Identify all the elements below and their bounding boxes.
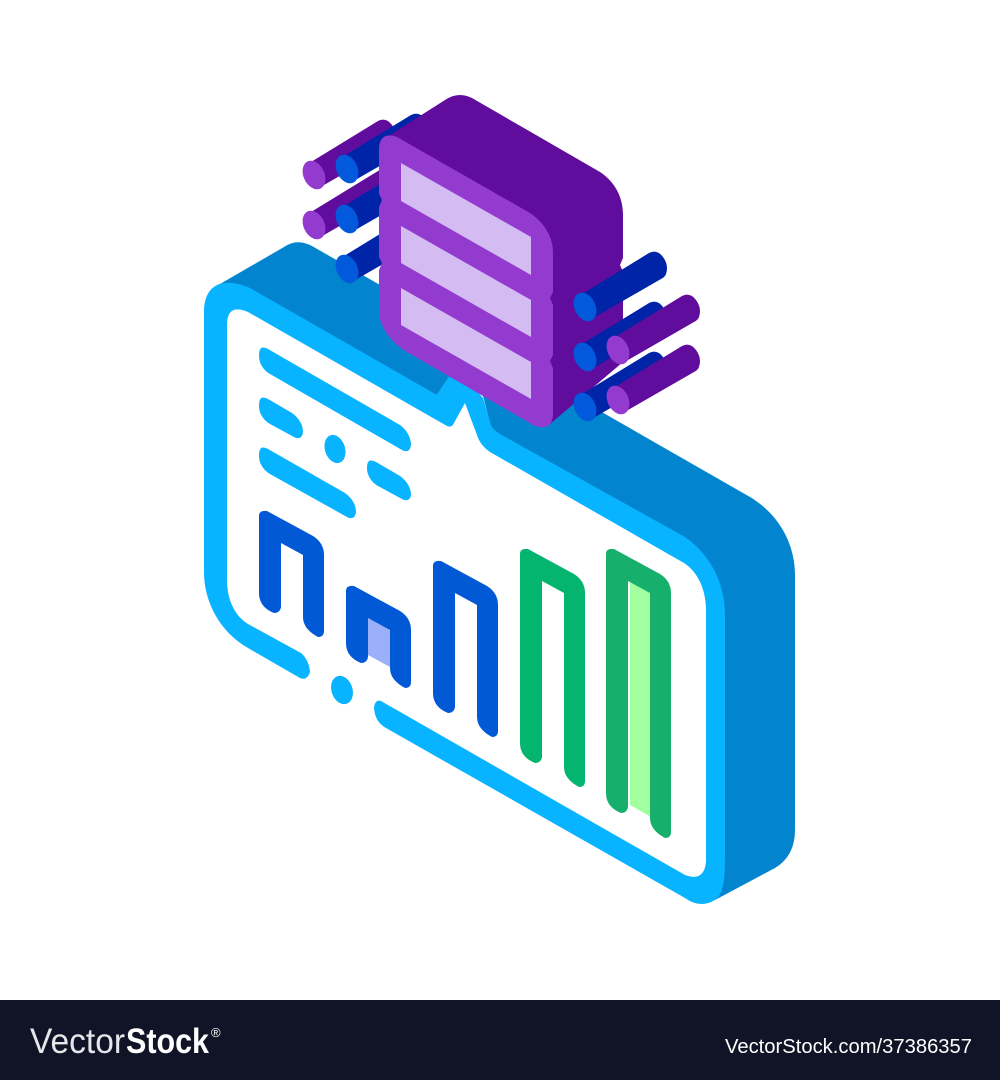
text line 1 — [259, 347, 411, 451]
text dot — [321, 432, 349, 466]
bar 2 — [346, 586, 411, 688]
server top and side — [390, 95, 623, 424]
frame dot — [328, 673, 356, 707]
bar 4 — [520, 549, 585, 787]
bar 5 fill — [630, 581, 651, 817]
registered mark: ® — [211, 1025, 221, 1040]
server window 2 — [401, 226, 531, 337]
text line 2 — [259, 397, 303, 438]
bar 1 — [259, 511, 324, 637]
bar 2 fill — [368, 617, 390, 667]
server icon — [379, 95, 623, 427]
panel depth side — [220, 242, 795, 900]
text line 4 — [367, 460, 411, 500]
right cylinders — [569, 252, 700, 425]
server window 1 — [401, 163, 531, 275]
panel front frame with speech pointer — [204, 283, 725, 904]
server window 3 — [401, 288, 531, 399]
speech bubble chart panel — [204, 242, 795, 904]
bar chart — [259, 511, 671, 838]
image url: VectorStock.com/37386357 — [725, 1036, 972, 1058]
brand logo text: Stock — [126, 1022, 209, 1061]
footer bar — [0, 1000, 1000, 1080]
left cylinders — [298, 114, 429, 287]
text line 3 — [259, 447, 356, 518]
bar 5 — [606, 549, 671, 838]
server front — [379, 136, 553, 427]
brand logo text: Vector — [30, 1022, 125, 1061]
bar 3 — [433, 561, 498, 737]
